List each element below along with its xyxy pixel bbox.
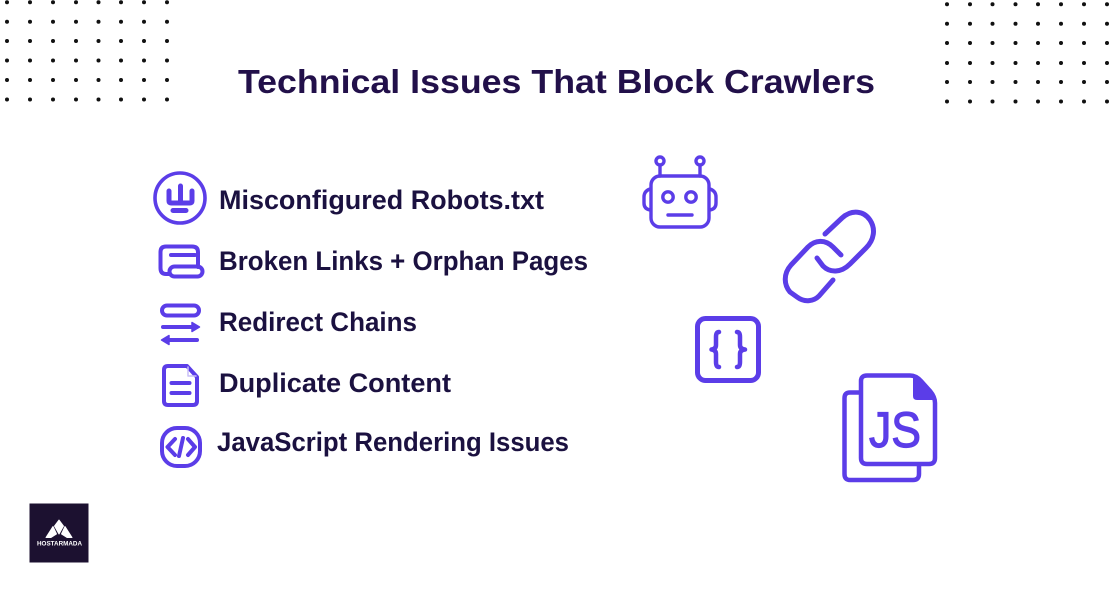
icon: js files: JS: [869, 402, 921, 458]
label: javascript rendering: JavaScript Rendering Issues: [217, 427, 569, 457]
label: redirect chains: Redirect Chains: [219, 307, 417, 337]
icon: duplicate document: [164, 366, 197, 405]
title: Technical Issues That Block Crawlers: [238, 63, 875, 100]
icon: robots.txt circle: [155, 173, 205, 223]
icon: redirect arrows: [162, 306, 200, 344]
list: technical issues: [155, 173, 588, 466]
icon: chain link: [785, 212, 873, 301]
logo: hostarmada: [30, 504, 88, 562]
icon: curly braces box: [698, 318, 758, 380]
logo wordmark: HOSTARMADA: [37, 540, 82, 548]
label: misconfigured robots: Misconfigured Robots.txt: [219, 185, 544, 215]
icon: robot: [644, 157, 716, 227]
icon: js files: [844, 376, 935, 480]
label: duplicate content: Duplicate Content: [219, 368, 451, 398]
icon: broken links scroll: [160, 246, 202, 276]
icon: code squircle: [162, 428, 200, 466]
label: broken links: Broken Links + Orphan Pages: [219, 246, 588, 276]
logo mark: [46, 520, 72, 538]
